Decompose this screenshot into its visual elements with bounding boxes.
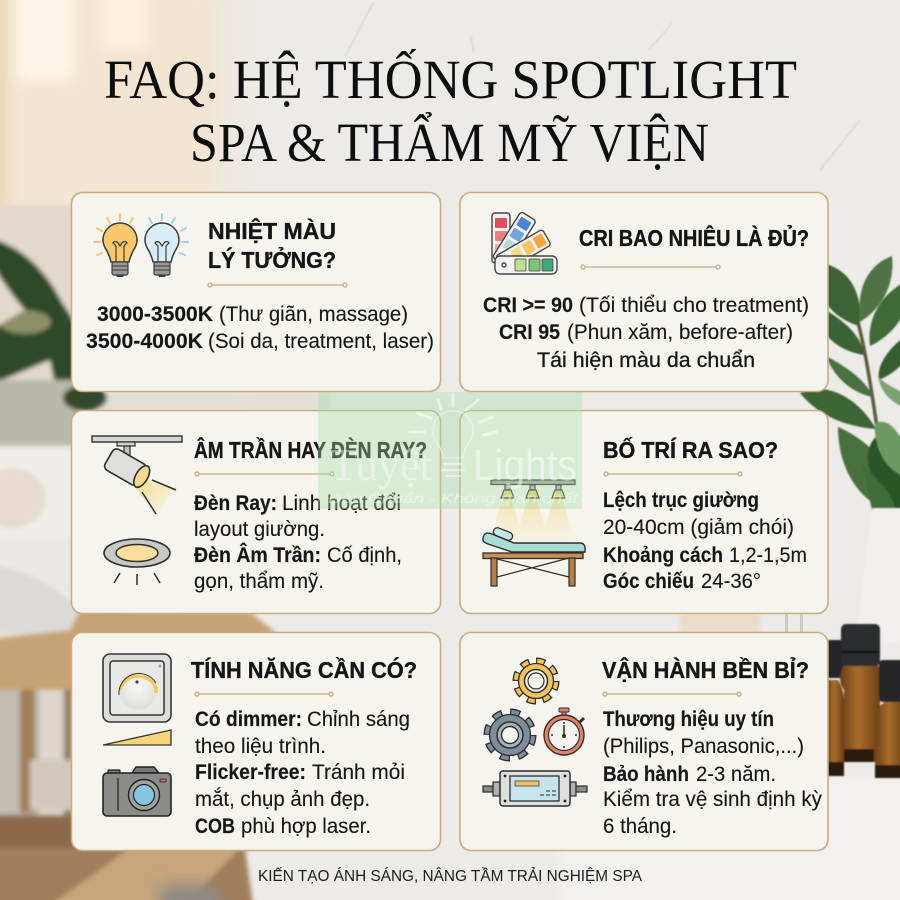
watermark: Tuyệt Lights: Tuyệt bbox=[330, 439, 432, 490]
text block bbox=[194, 491, 402, 593]
text block: COB bbox=[195, 814, 235, 838]
vase bbox=[857, 508, 900, 645]
text block: Tái hiện màu da chuẩn bbox=[537, 348, 755, 372]
heading: TÍNH NĂNG CẦN CÓ? bbox=[191, 656, 417, 683]
text block: 2-3 năm. bbox=[696, 762, 776, 786]
icon: LED driver bbox=[483, 771, 587, 806]
text block: (Thư giãn, massage) bbox=[219, 302, 408, 326]
text block: theo liệu trình. bbox=[195, 734, 326, 758]
text block bbox=[195, 707, 410, 838]
panel: vận hành bền bỉ bbox=[460, 632, 828, 850]
footer tagline: KIẾN TẠO ÁNH SÁNG, NÂNG TẦM TRẢI NGHIỆM SPA bbox=[258, 866, 642, 885]
heading: LÝ TƯỞNG? bbox=[208, 245, 336, 273]
text block: gọn, thẩm mỹ. bbox=[194, 569, 324, 593]
panel: CRI bao nhiêu là đủ bbox=[460, 192, 828, 392]
text block: (Tối thiểu cho treatment) bbox=[579, 293, 809, 317]
text block: 3500-4000K bbox=[86, 329, 203, 353]
panel: tính năng cần có bbox=[72, 632, 440, 850]
text block: CRI 95 bbox=[499, 320, 560, 344]
text block: Tránh mỏi bbox=[312, 760, 405, 784]
text block: Cố định, bbox=[327, 543, 402, 567]
text block: Bảo hành bbox=[603, 762, 689, 786]
text block: 20-40cm (giảm chói) bbox=[603, 515, 794, 539]
heading: CRI BAO NHIÊU LÀ ĐỦ? bbox=[579, 223, 809, 251]
text block: Lệch trục giường bbox=[603, 488, 759, 512]
icon: yellow gear bbox=[516, 661, 556, 701]
heading: BỐ TRÍ RA SAO? bbox=[603, 436, 778, 463]
text block: Flicker-free: bbox=[195, 760, 306, 784]
text block bbox=[603, 707, 822, 838]
heading: ÂM TRẦN HAY ĐÈN RAY? bbox=[194, 436, 427, 463]
heading: NHIỆT MÀU bbox=[208, 217, 336, 244]
text block: CRI >= 90 bbox=[483, 293, 573, 317]
text block: 3000-3500K bbox=[97, 302, 213, 326]
text block: 24-36° bbox=[701, 569, 761, 593]
heading: VẬN HÀNH BỀN BỈ? bbox=[602, 655, 809, 683]
text block bbox=[86, 302, 434, 353]
text block: phù hợp laser. bbox=[241, 814, 371, 838]
icon: colour swatch fan bbox=[492, 211, 557, 274]
watermark: Tuyệt Lights: Lights bbox=[473, 441, 577, 490]
title: FAQ: HỆ THỐNG SPOTLIGHT bbox=[104, 49, 797, 110]
icon: brightness wedge bbox=[103, 730, 171, 745]
text block: Thương hiệu uy tín bbox=[603, 707, 774, 731]
text block: Có dimmer: bbox=[195, 707, 302, 731]
watermark: Tuyệt Lights bbox=[318, 392, 582, 509]
panel: nhiệt màu lý tưởng bbox=[72, 192, 440, 392]
text block: 6 tháng. bbox=[603, 814, 677, 838]
icon: dimmer switch bbox=[103, 654, 171, 722]
text block: Đèn Ray: bbox=[194, 491, 277, 515]
text block: Kiểm tra vệ sinh định kỳ bbox=[603, 787, 822, 811]
icon: recessed downlight bbox=[104, 539, 170, 585]
panel: bố trí ra sao bbox=[460, 410, 828, 614]
text block: Chỉnh sáng bbox=[307, 707, 410, 731]
icon: stopwatch bbox=[544, 708, 584, 755]
panel: âm trần hay đèn ray bbox=[72, 410, 440, 614]
icon: grey gear bbox=[487, 712, 533, 758]
text block: Khoảng cách bbox=[603, 543, 723, 567]
title: SPA & THẨM MỸ VIỆN bbox=[190, 111, 709, 173]
watermark: Tuyệt Lights: Đèn Chuẩn - Không gian chất bbox=[328, 490, 579, 506]
icon: warm bulb and cool bulb bbox=[94, 214, 188, 277]
icon: track light bbox=[92, 436, 182, 514]
text block: (Soi da, treatment, laser) bbox=[208, 329, 434, 353]
text block: (Philips, Panasonic,...) bbox=[603, 734, 804, 758]
plant: leaves right bbox=[800, 256, 900, 510]
text block bbox=[603, 488, 807, 593]
text block: Linh hoạt đổi bbox=[282, 491, 401, 515]
text block: layout giường. bbox=[194, 517, 325, 541]
icon: spotlights over massage bed bbox=[483, 480, 585, 586]
icon: camera bbox=[103, 767, 171, 816]
text block: (Phun xăm, before-after) bbox=[567, 320, 793, 344]
text block bbox=[483, 293, 809, 372]
amber bottles bbox=[826, 624, 900, 778]
text block: 1,2-1,5m bbox=[729, 543, 807, 567]
heading bbox=[208, 217, 336, 273]
text block: mắt, chụp ảnh đẹp. bbox=[195, 786, 370, 811]
title bbox=[104, 49, 797, 173]
text block: Góc chiếu bbox=[603, 569, 694, 593]
text block: Đèn Âm Trần: bbox=[194, 542, 321, 567]
